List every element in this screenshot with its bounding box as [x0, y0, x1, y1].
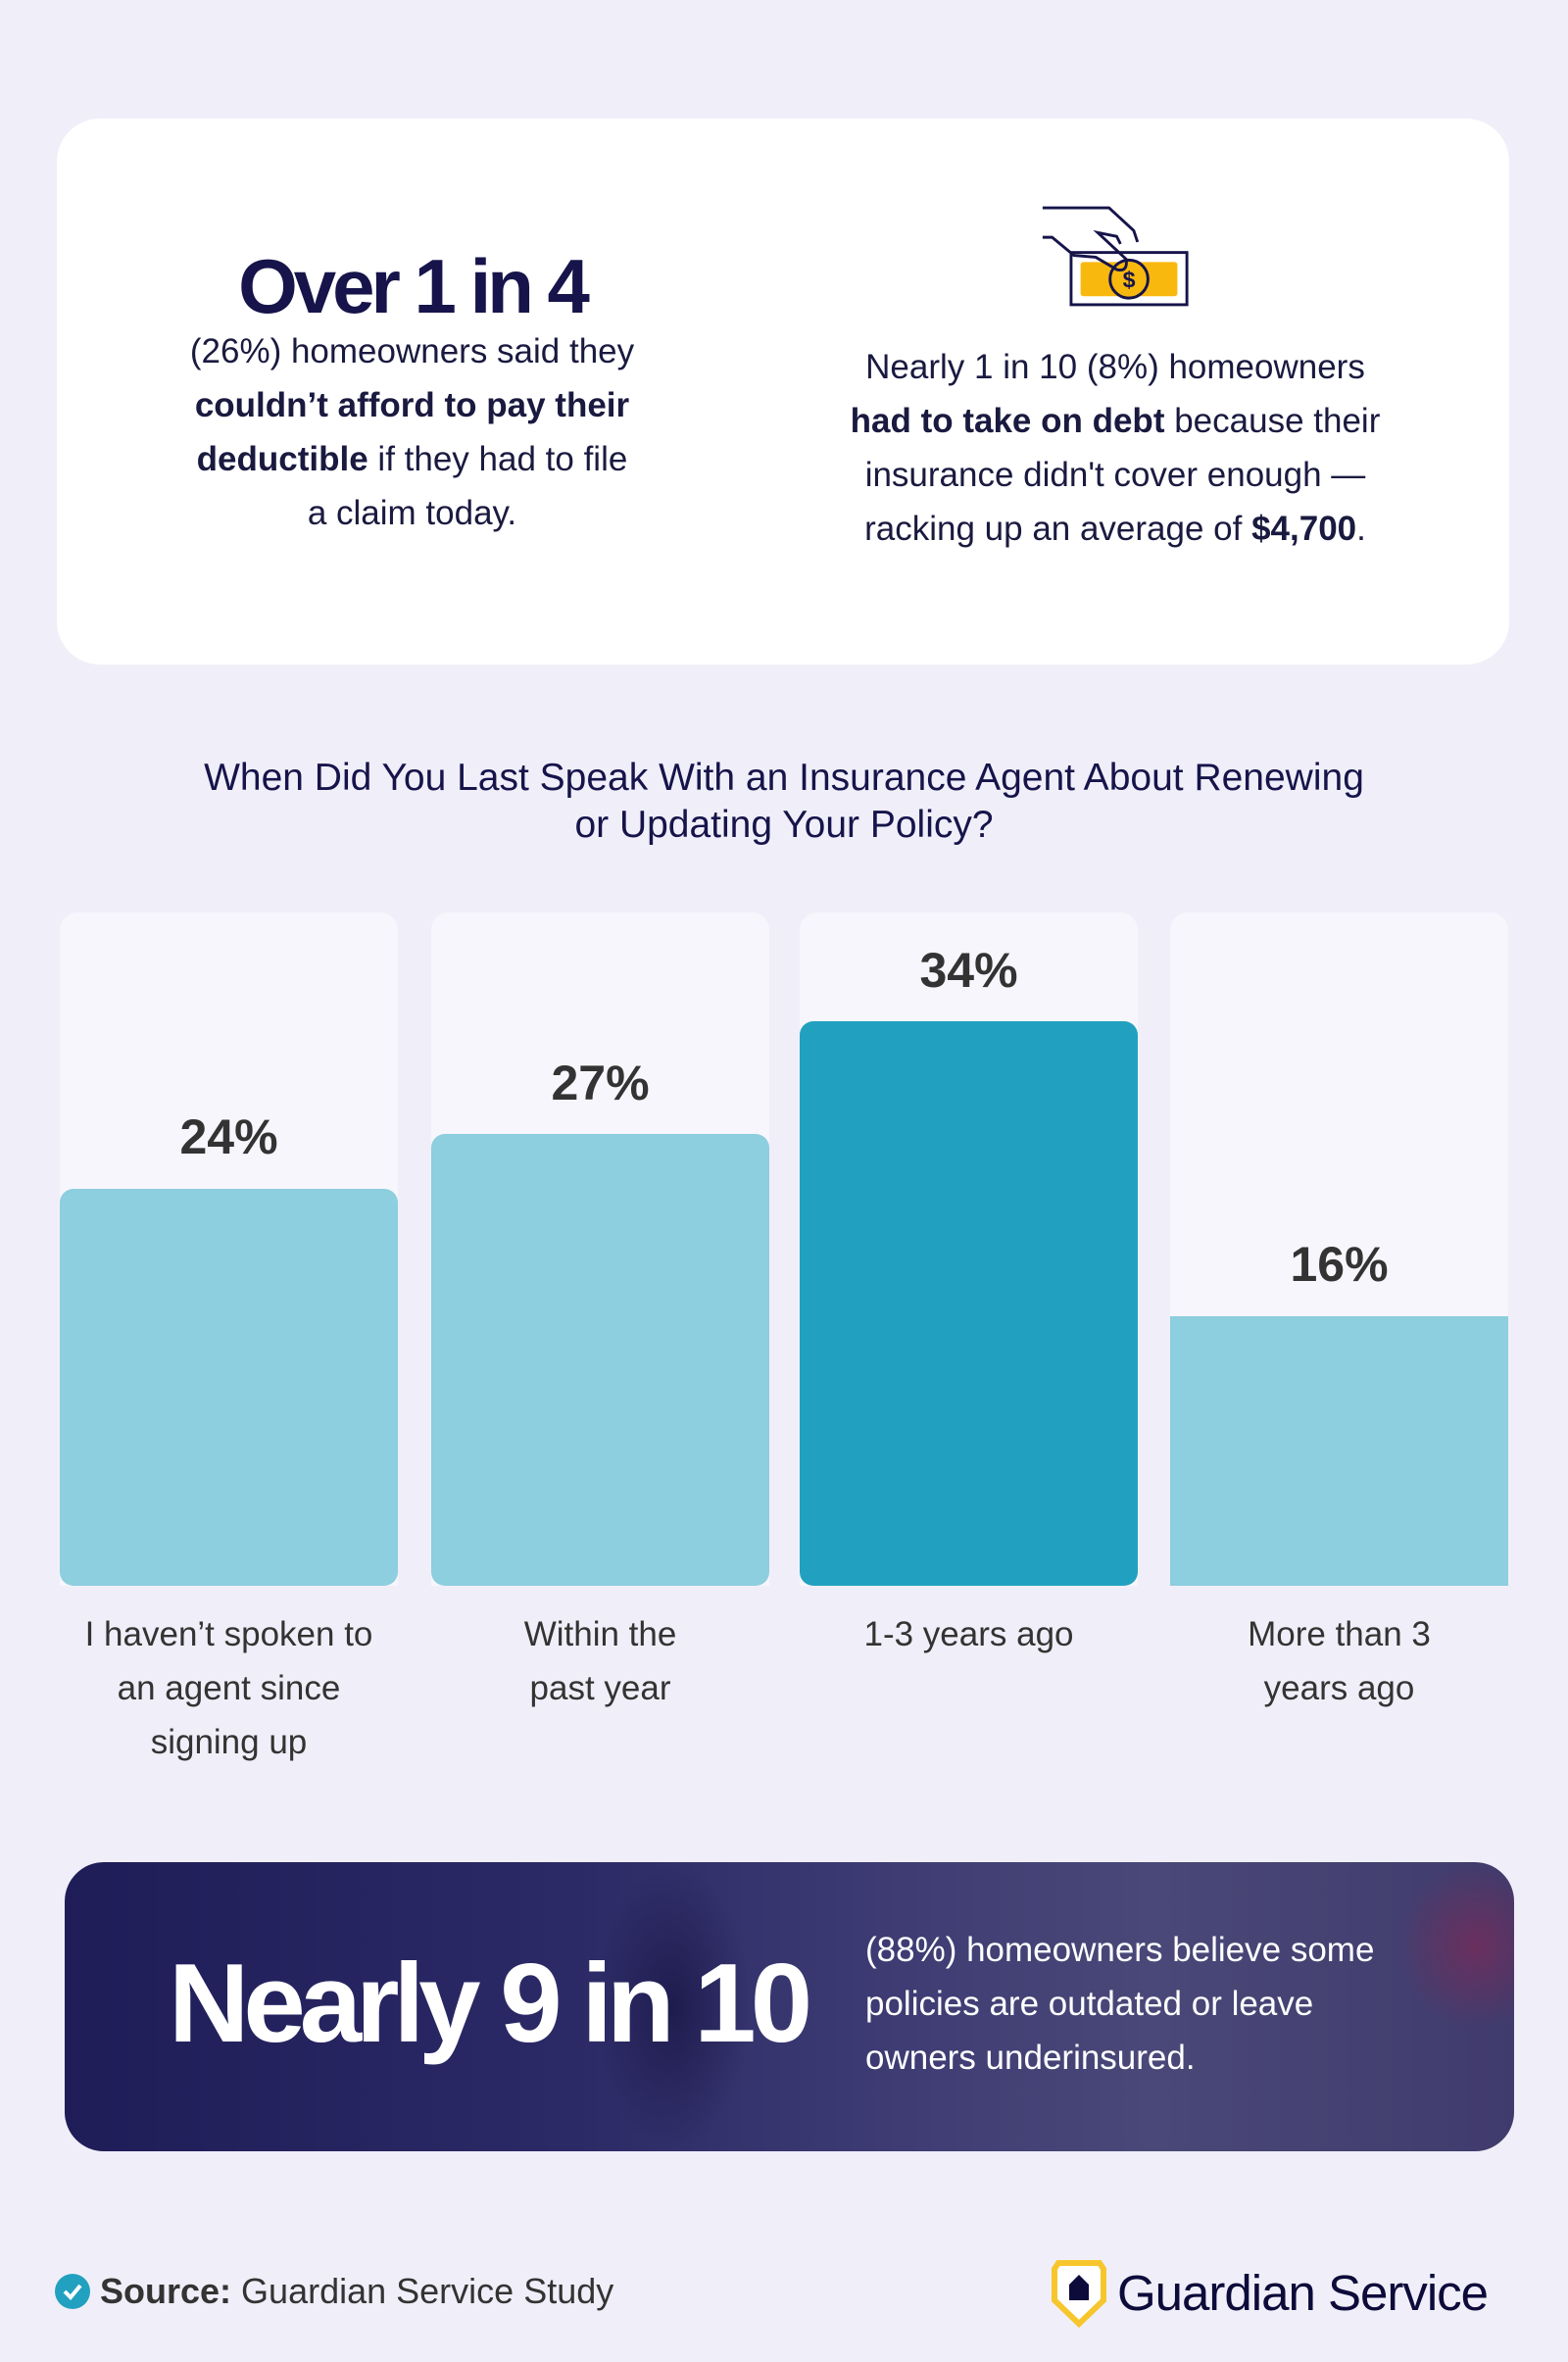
text: deductible stat: (26%) homeowners said they — [190, 332, 634, 370]
label: more than 3 — [1248, 1615, 1431, 1707]
text: deductible stat — [190, 332, 634, 532]
text: deductible stat: couldn’t afford to pay their — [195, 386, 629, 424]
chart title: When Did You Last Speak With an Insurance Agent About Renewing — [204, 757, 1364, 799]
bar: haven't spoken 24% — [60, 912, 398, 1586]
label: haven't spoken: an agent since — [118, 1669, 340, 1707]
text: 88% stat: (88%) homeowners believe some — [865, 1931, 1374, 1969]
text: deductible stat: deductible if they had to file — [197, 440, 627, 478]
bar: 1-3 years 34% — [800, 912, 1138, 1586]
bar chart — [60, 943, 1508, 1586]
text: 88% stat: policies are outdated or leave — [865, 1985, 1313, 2023]
text: debt stat: Nearly 1 in 10 (8%) homeowners — [865, 348, 1365, 386]
bar: within past year 27% — [431, 912, 769, 1586]
label: haven't spoken — [85, 1615, 372, 1761]
chart title — [204, 757, 1364, 846]
text: debt stat — [851, 348, 1380, 548]
heading: nearly 9 in 10: Nearly 9 in 10 — [169, 1942, 807, 2066]
text: debt stat: had to take on debt because their — [851, 402, 1380, 440]
label: within past year: Within the — [524, 1615, 676, 1653]
icon: hand with money: $ — [1123, 267, 1136, 292]
bar: more than 3 years 16%: 16% — [1290, 1237, 1389, 1292]
text: 88% stat — [865, 1931, 1374, 2077]
text: deductible stat: a claim today. — [308, 494, 516, 532]
bar: within past year 27%: 27% — [551, 1056, 650, 1110]
label: more than 3: years ago — [1264, 1669, 1414, 1707]
label: more than 3: More than 3 — [1248, 1615, 1431, 1653]
label: haven't spoken: signing up — [151, 1723, 307, 1761]
bar: haven't spoken 24%: 24% — [179, 1109, 278, 1164]
bar: more than 3 years 16% — [1170, 912, 1508, 1586]
label: 1-3 years: 1-3 years ago — [863, 1615, 1074, 1653]
logo: guardian service: Guardian Service — [1117, 2264, 1488, 2321]
bar: 1-3 years 34%: 34% — [919, 943, 1018, 998]
icon: check — [55, 2274, 90, 2309]
chart title: or Updating Your Policy? — [574, 804, 994, 846]
label: haven't spoken: I haven’t spoken to — [85, 1615, 372, 1653]
icon: hand with money — [1043, 206, 1189, 306]
label: within past year — [523, 1615, 676, 1707]
panel: nearly 9 in 10 banner — [65, 1862, 1514, 2151]
icon: shield — [1052, 2260, 1106, 2328]
label: within past year: past year — [530, 1669, 670, 1707]
panel: top stats card — [57, 119, 1509, 664]
text: debt stat: racking up an average of $4,700. — [864, 510, 1366, 548]
footer: source: Source: Guardian Service Study — [100, 2271, 613, 2311]
text: 88% stat: owners underinsured. — [865, 2039, 1196, 2077]
text: debt stat: insurance didn't cover enough — — [865, 456, 1365, 494]
heading: over 1 in 4: Over 1 in 4 — [238, 243, 586, 329]
